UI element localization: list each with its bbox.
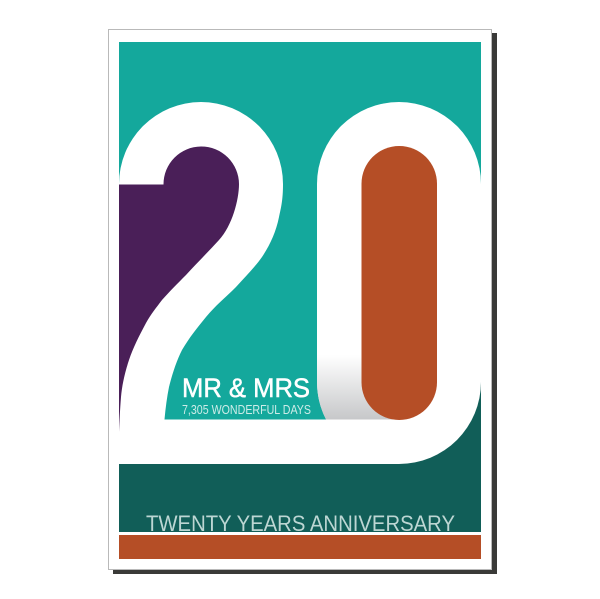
panel: dark teal band (119, 382, 481, 532)
card drop shadow (113, 33, 497, 574)
heading: MR & MRS: MR & MRS (182, 373, 310, 403)
numeral 0 orange counter (362, 146, 437, 420)
numeral 0 grey fold shadow (317, 355, 399, 420)
title: twenty years anniversary: TWENTY YEARS ANNIVERSARY (146, 511, 455, 536)
numeral 0 white ring (317, 102, 481, 464)
numeral 2 (119, 102, 399, 464)
numeral 2 purple counter (119, 146, 239, 432)
panel: orange footer bar (119, 535, 481, 559)
panel: teal background (119, 42, 481, 464)
card (108, 30, 492, 570)
numeral 2 white body (119, 102, 399, 464)
numeral 0 (317, 102, 481, 464)
subheading: wonderful days: 7,305 WONDERFUL DAYS (182, 403, 311, 417)
